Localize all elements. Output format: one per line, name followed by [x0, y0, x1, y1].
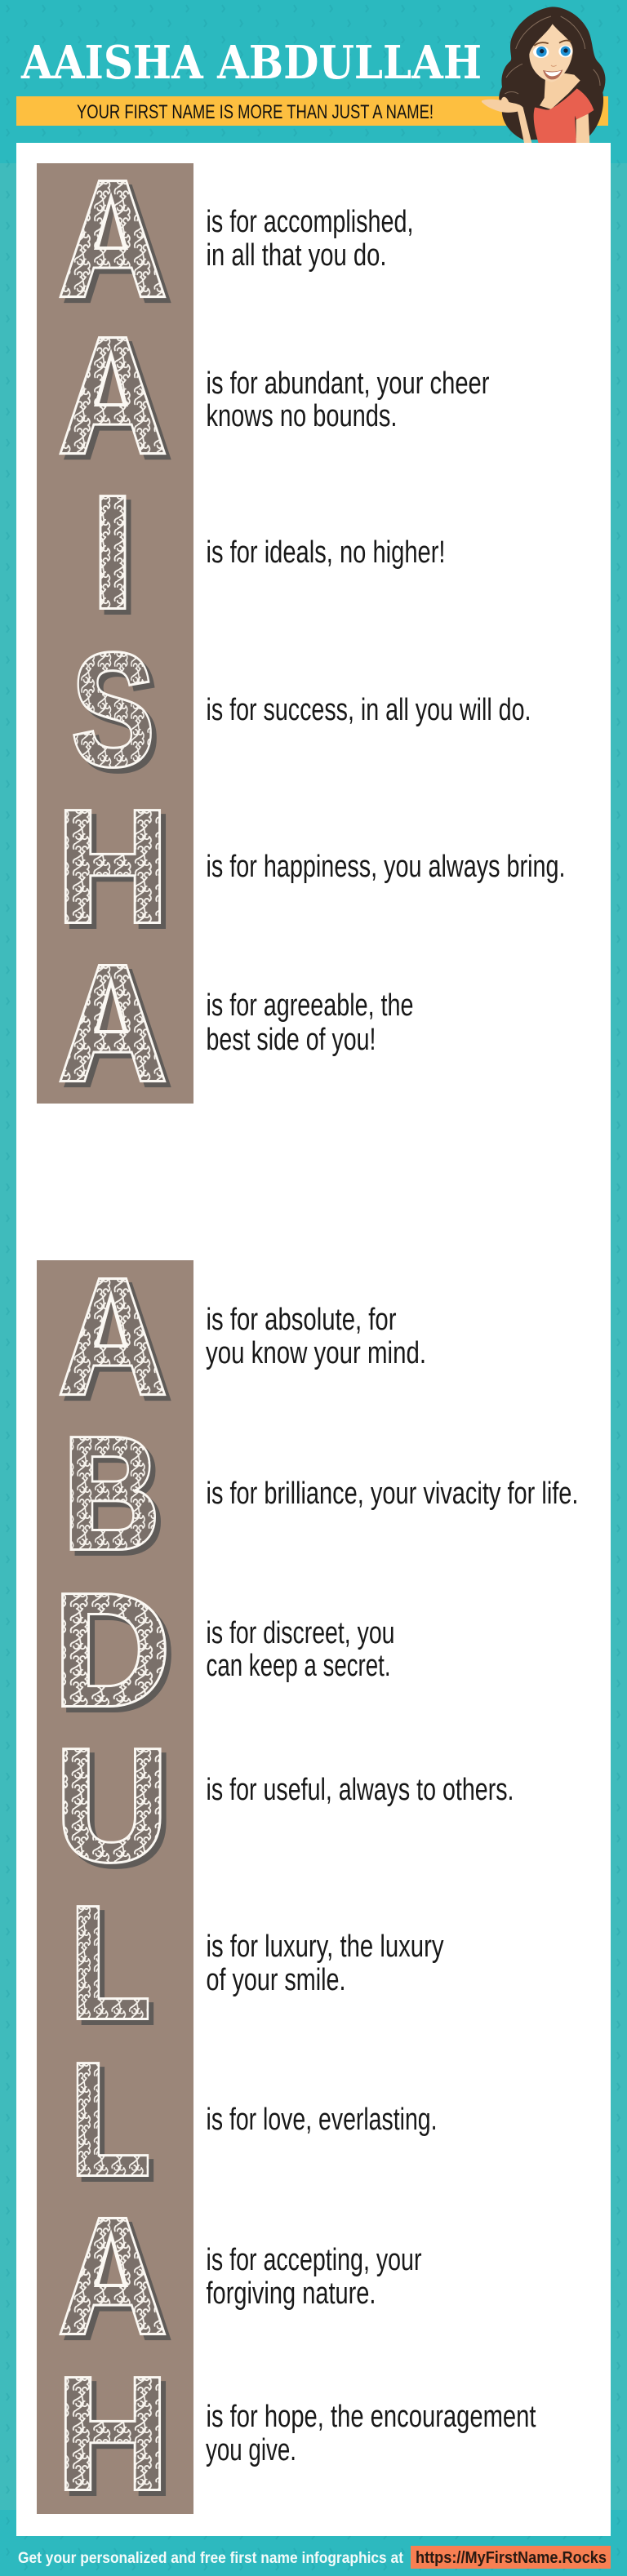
letter A: A — [58, 2183, 167, 2368]
subtitle: YOUR FIRST NAME IS MORE THAN JUST A NAME! — [77, 101, 434, 123]
letter H: H — [56, 2345, 169, 2524]
text block: last name lines — [206, 1303, 578, 2467]
letter H: H — [56, 778, 169, 957]
letter A: A — [63, 1249, 172, 1433]
line: luxury — [206, 1930, 444, 1997]
line: agreeable: best side of you! — [206, 1023, 376, 1057]
line: accepting: is for accepting, your — [206, 2243, 422, 2277]
text block: first name lines — [206, 205, 565, 1057]
panel: last name letters — [37, 1244, 193, 2529]
letter L: L — [74, 2036, 156, 2214]
footer text: Get your personalized and free first name infographics at — [18, 2550, 404, 2567]
letter I: I — [96, 467, 139, 646]
line: agreeable — [206, 988, 413, 1057]
line: discreet: can keep a secret. — [206, 1649, 390, 1683]
letter S: S — [72, 621, 154, 799]
title: AAISHA ABDULLAH — [20, 36, 482, 90]
line: accomplished: in all that you do. — [206, 238, 387, 273]
line: discreet: is for discreet, you — [206, 1616, 395, 1650]
line: accepting: forgiving nature. — [206, 2276, 376, 2311]
line: abundant: is for abundant, your cheer — [206, 366, 490, 401]
letter L: L — [74, 1879, 156, 2057]
line: accomplished: is for accomplished, — [206, 205, 413, 239]
line: discreet — [206, 1616, 395, 1683]
panel: first name letters — [37, 146, 193, 1120]
letter U: U — [56, 1716, 168, 1894]
letter A: A — [63, 2188, 172, 2373]
line: absolute: is for absolute, for — [206, 1303, 397, 1337]
letter A: A — [63, 151, 172, 335]
letter L: L — [69, 2031, 151, 2209]
footer link badge: https://MyFirstName.Rocks — [416, 2549, 607, 2567]
line: hope: you give. — [206, 2433, 296, 2467]
line: useful: is for useful, always to others. — [206, 1773, 514, 1807]
letter L: L — [69, 1874, 151, 2052]
line: agreeable: is for agreeable, the — [206, 988, 413, 1023]
line: abundant: knows no bounds. — [206, 399, 397, 433]
letter I: I — [91, 462, 134, 642]
line: ideals: is for ideals, no higher! — [206, 535, 446, 570]
line: love: is for love, everlasting. — [206, 2103, 438, 2137]
line: accomplished — [206, 205, 413, 273]
letter A: A — [58, 146, 167, 331]
letter A: A — [63, 308, 172, 492]
letter A: A — [58, 1244, 167, 1428]
letter B: B — [68, 1409, 165, 1588]
letter D: D — [53, 1561, 171, 1739]
line: luxury: of your smile. — [206, 1963, 346, 1997]
header banner: yellow strip — [16, 96, 608, 126]
line: absolute — [206, 1303, 426, 1370]
letter A: A — [58, 930, 167, 1115]
line: success: is for success, in all you will do. — [206, 693, 531, 727]
line: accepting — [206, 2243, 422, 2311]
letter H: H — [61, 783, 174, 962]
line: luxury: is for luxury, the luxury — [206, 1930, 444, 1964]
letter B: B — [63, 1404, 160, 1583]
letter U: U — [60, 1721, 173, 1899]
letter S: S — [77, 626, 159, 804]
icon: cartoon woman — [482, 7, 606, 144]
line: abundant — [206, 366, 490, 433]
letter A: A — [58, 303, 167, 487]
line: hope — [206, 2400, 536, 2467]
letter H: H — [61, 2350, 174, 2529]
letter D: D — [58, 1566, 176, 1744]
line: hope: is for hope, the encouragement — [206, 2400, 536, 2434]
letter A: A — [63, 935, 172, 1120]
line: absolute: you know your mind. — [206, 1336, 426, 1370]
